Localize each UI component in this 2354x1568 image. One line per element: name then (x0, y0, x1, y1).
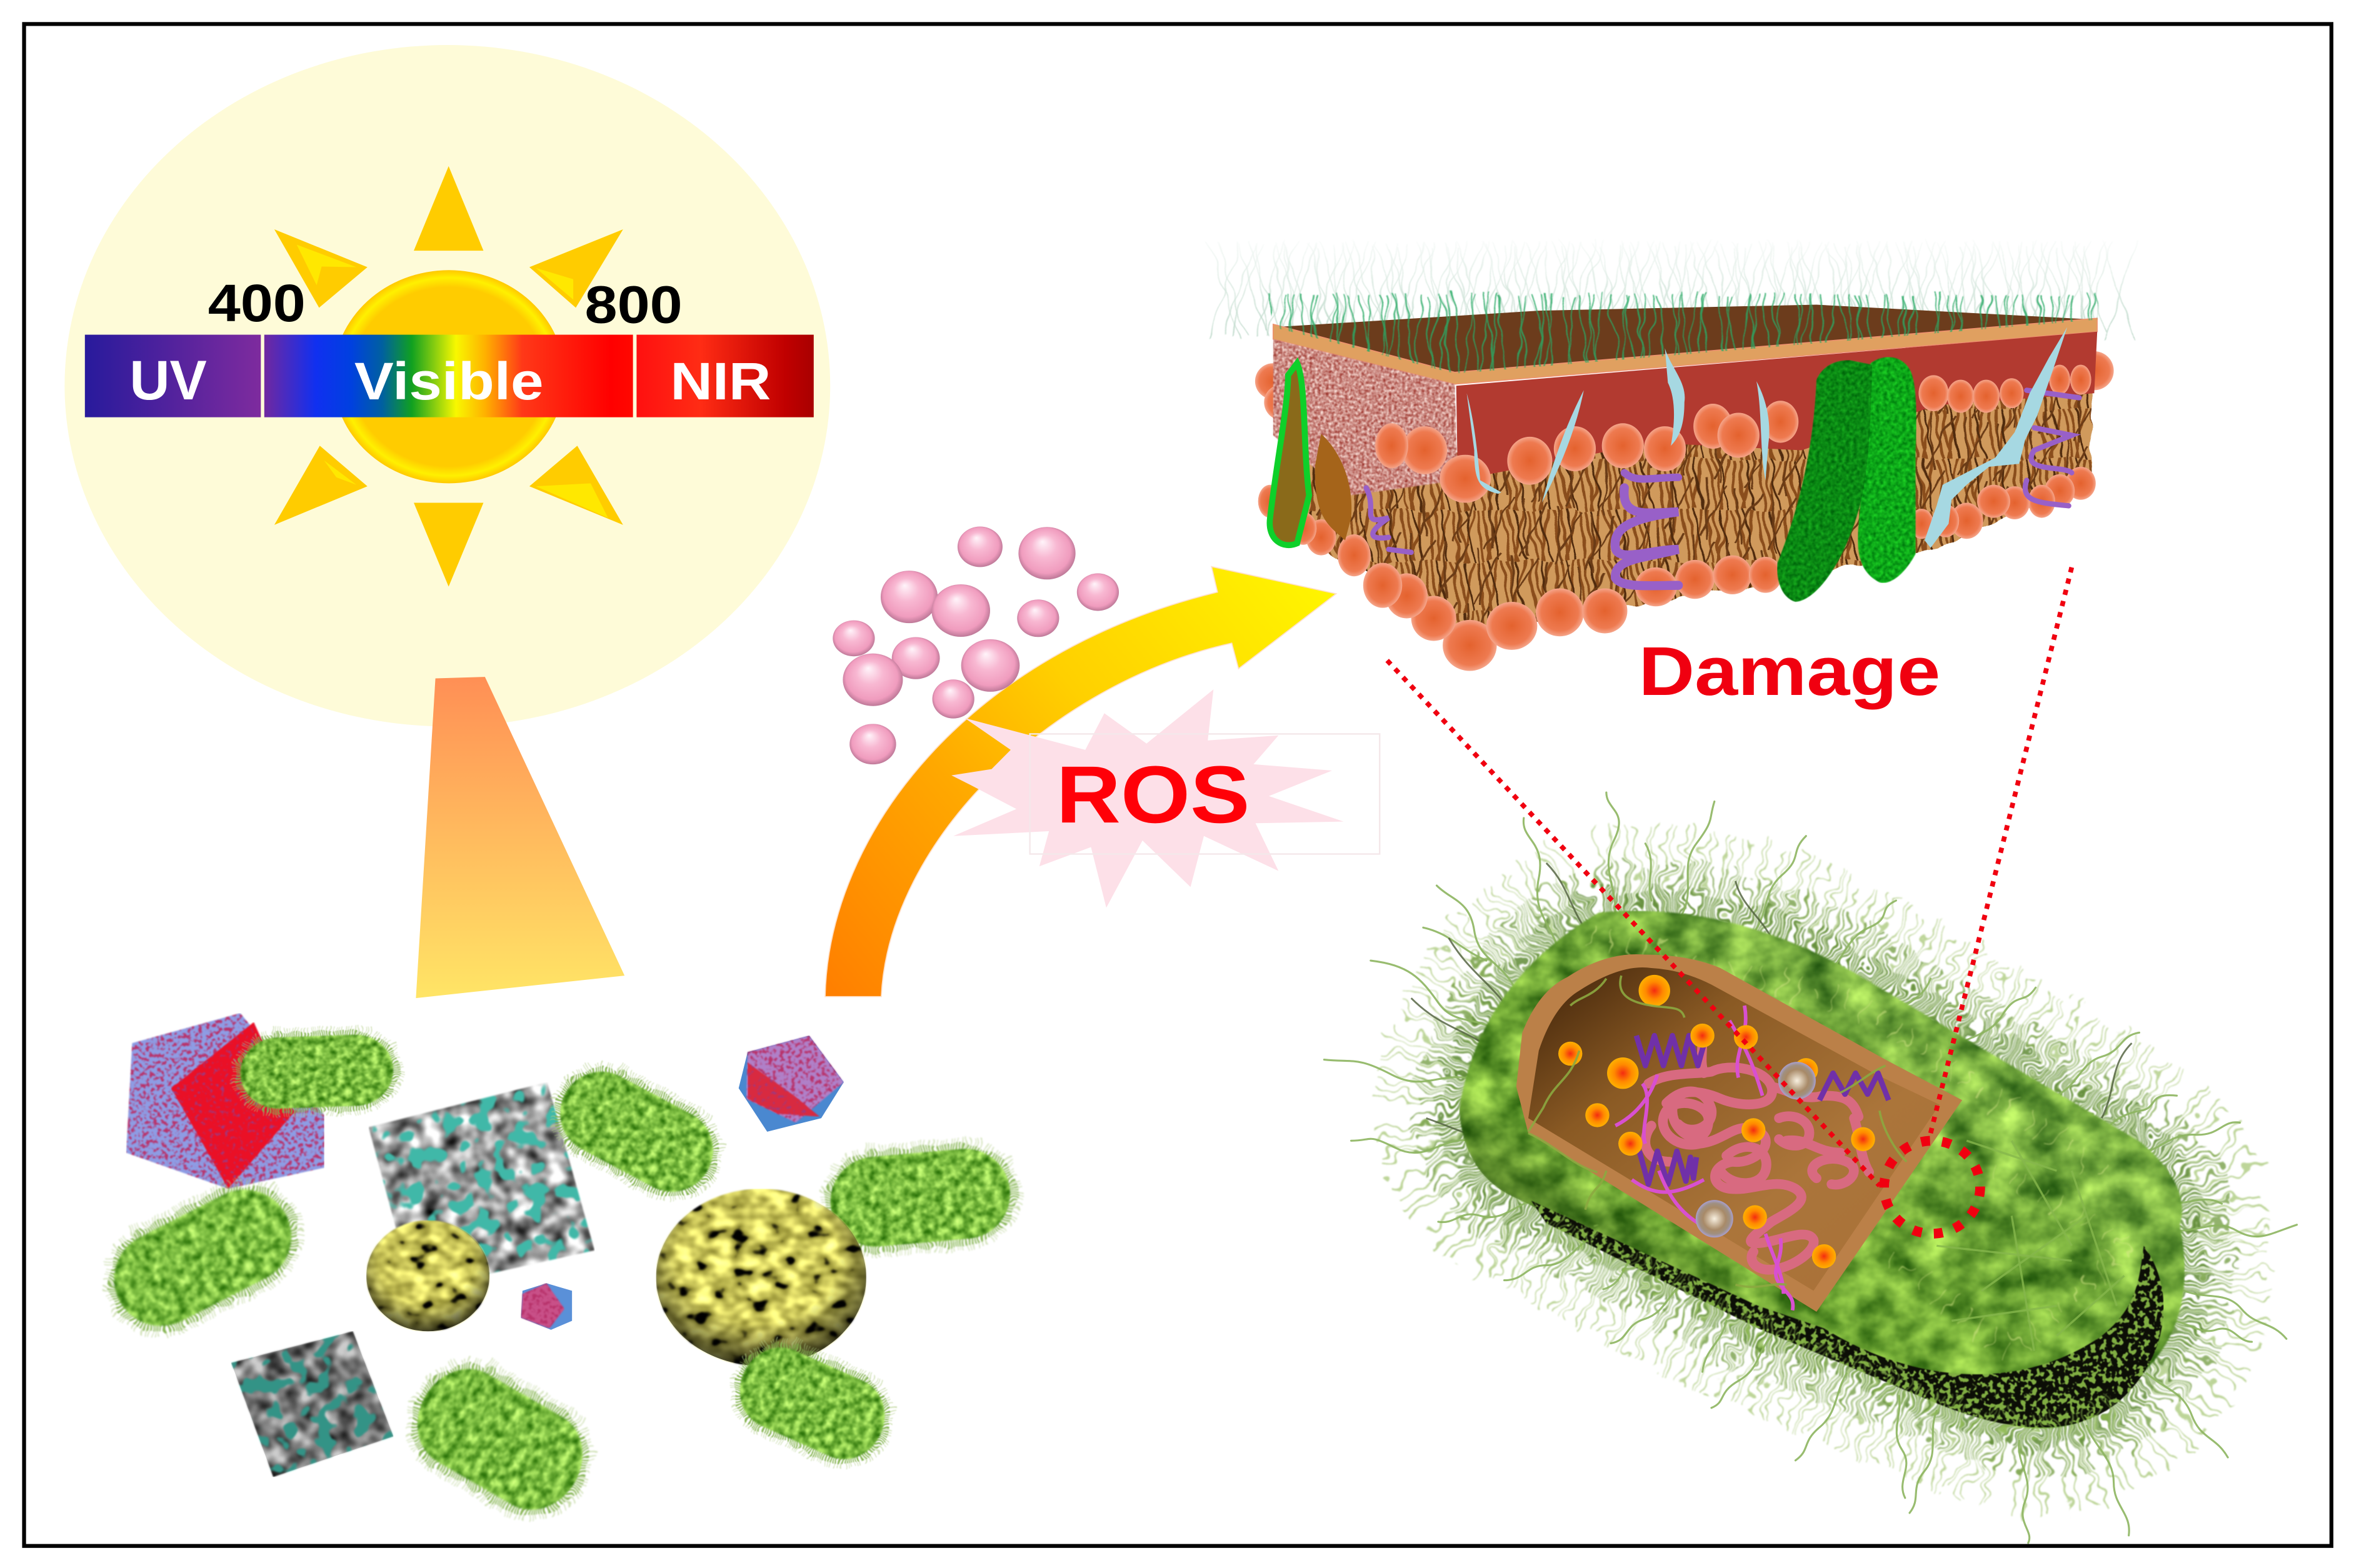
surface hairs, pale (1223, 269, 2125, 307)
body shading (1460, 911, 2185, 1429)
bacterium body (1460, 911, 2185, 1429)
spectrum bar: UV (129, 349, 207, 411)
icon: sun (274, 166, 623, 587)
dark hairs (1411, 863, 2131, 1141)
light body specks and strands (1591, 938, 2131, 1351)
surface hairs, green (1260, 317, 2103, 349)
hair halo, short (1460, 911, 2185, 1429)
small protein, green outline (1270, 363, 1309, 545)
bacterium 5 (727, 1335, 898, 1472)
faint label box (1030, 734, 1380, 854)
dotted zoom line right (1931, 567, 2071, 1133)
gray square particle, small (231, 1331, 393, 1477)
gray square particle, large (369, 1082, 594, 1291)
panel: damaged membrane close-up (1223, 288, 2125, 710)
curved arrow (825, 567, 1336, 997)
green fibres over cut (1528, 976, 1906, 1287)
panel: nanoparticles and bacteria (98, 1013, 1014, 1526)
bacterium 4 (98, 1174, 308, 1342)
spectrum bar: Visible (354, 352, 544, 411)
panel: sun and light spectrum (64, 45, 830, 726)
purple RNA zigzags (1636, 1036, 1888, 1184)
upper lipid heads (1375, 365, 2091, 503)
ribosome-like particles (1696, 1062, 1816, 1237)
tiny polyhedron particle (521, 1283, 572, 1330)
lipid bilayer band (1276, 382, 2093, 638)
top surface (1273, 305, 2097, 374)
purple protein coils (1366, 390, 2079, 586)
glow disc (64, 45, 830, 726)
fuzzy hair over lower edge (1546, 1223, 2116, 1427)
bacterium 2 (546, 1057, 728, 1206)
lower lipid heads (1258, 467, 2096, 671)
dashed damage circle (1884, 1141, 1980, 1234)
hair halo, long (1460, 911, 2185, 1429)
orange granules (1558, 975, 1875, 1268)
dark underside, lower edge (1531, 1201, 2163, 1427)
bacterium 3 (826, 1145, 1014, 1251)
large gold sphere (656, 1189, 866, 1366)
lipid heads behind faces (1255, 351, 2114, 468)
loose curly hairs (1324, 792, 2297, 1543)
cutaway interior (1528, 967, 1940, 1291)
large octahedron particle (126, 1013, 324, 1189)
damage pores, light blue (1467, 327, 2067, 548)
starburst (951, 689, 1344, 908)
small protein, brown (1315, 434, 1351, 541)
bacterium 1 (239, 1033, 394, 1110)
label 800: 800 (585, 275, 683, 334)
ROS burst (951, 689, 1380, 908)
panel: large bacterium cross-section (1324, 567, 2297, 1543)
hair halo, dense base (1460, 911, 2185, 1429)
small polyhedron particle (739, 1036, 844, 1132)
small gold sphere (366, 1221, 489, 1331)
right face (1456, 332, 2097, 481)
large green protein channel (1777, 357, 1916, 602)
left face, textured (1273, 339, 1458, 496)
light beam (416, 677, 624, 998)
damage label: Damage (1639, 633, 1940, 710)
cutaway rim (1516, 954, 1962, 1312)
spectrum bar: NIR (670, 352, 771, 411)
spectrum bar (85, 335, 814, 417)
ROS particles (833, 526, 1119, 764)
label 400: 400 (208, 274, 306, 332)
DNA tangle (1645, 1031, 1869, 1270)
ROS label: ROS (1056, 750, 1250, 840)
rim (1273, 318, 2097, 384)
dotted zoom line left (1387, 661, 1880, 1186)
bacterium 6 (400, 1352, 600, 1526)
magenta crosses (1615, 1006, 1793, 1311)
